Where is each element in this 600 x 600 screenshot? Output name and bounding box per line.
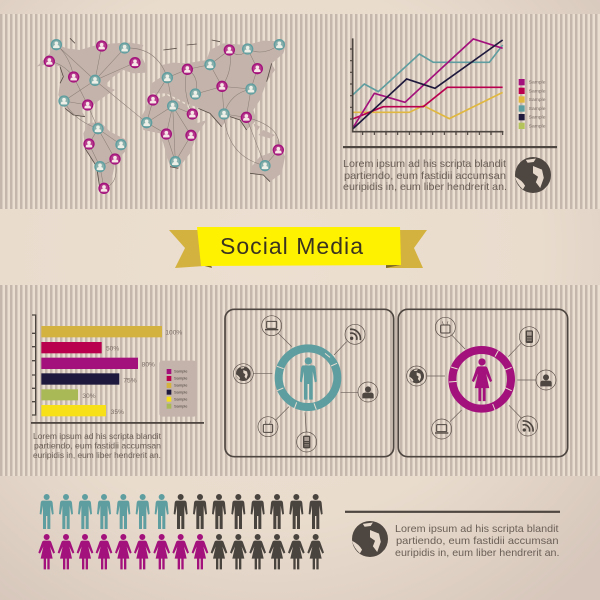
panel frame [225,309,394,457]
banner [169,227,427,268]
chart legend: Sample [529,106,546,112]
divider rule: top right [343,146,557,148]
female figure [472,358,492,401]
bar chart legend: Sample [174,403,188,408]
bar chart legend: Sample [174,369,188,374]
striped band: top [0,14,600,209]
text block: bars: partiendo, eum fastidii accumsan [34,440,161,450]
bar value labels: 50% [106,345,119,352]
map coast shadows [60,38,272,190]
bar chart [32,315,197,417]
connector lines [253,333,358,432]
magenta ring [449,350,512,410]
text block: top right [343,158,507,193]
bar value labels: 35% [111,409,124,416]
chart legend: Sample [529,88,546,94]
text block: top right: euripidis in, eum liber hendrerit an. [343,181,507,193]
icon: globe [407,366,427,386]
icon: phone [519,327,539,347]
map continents [37,41,287,193]
chart legend [519,79,546,129]
bar value labels: 75% [123,377,137,384]
chart legend: Sample [529,97,546,103]
title: Social Media [220,233,363,259]
line chart [350,38,546,135]
map nodes: magenta [44,40,284,194]
map nodes: teal [51,39,285,172]
icon: person [536,370,556,390]
text block: bars [33,431,162,460]
text block: bars: Lorem ipsum ad his scripta blandit [33,431,162,441]
bar chart legend: Sample [174,376,188,381]
icon: globe [233,364,253,384]
icon: person [358,382,378,402]
chart legend: Sample [529,80,546,86]
bars [41,326,162,416]
banner folds [201,265,400,268]
bar chart legend: Sample [174,396,188,401]
map connector lines [49,45,279,188]
bar value labels [82,329,182,416]
divider rule: bottom [345,511,560,513]
text block: bottom [395,523,560,559]
panel frame [398,309,568,457]
chart legend: Sample [529,115,546,121]
bar value labels: 80% [142,361,155,368]
icon: tv [435,317,455,337]
connector lines [427,335,536,422]
divider rule: bars [31,422,204,424]
icon: globe top right [515,157,551,193]
bar chart legend [159,361,197,417]
bar value labels: 100% [165,329,182,336]
text block: bottom: euripidis in, eum liber hendrerit an. [395,547,560,559]
text block: top right: partiendo, eum fastidii accumsan [344,170,506,182]
text block: bottom: partiendo, eum fastidii accumsan [396,535,559,547]
teal ring [277,348,337,410]
male figure [300,357,317,400]
icon: globe bottom [352,521,388,557]
bar chart legend: Sample [174,389,188,394]
icon: rss [518,416,538,436]
panel: female network [398,309,568,457]
pictogram: men row [40,494,323,529]
icon: phone [297,432,317,452]
text block: bottom: Lorem ipsum ad his scripta blandit [395,523,559,535]
text block: top right: Lorem ipsum ad his scripta blandit [343,158,506,170]
bar chart axis [32,315,36,415]
banner right tail [386,230,427,268]
bar chart legend: Sample [174,383,188,388]
pictogram: women row [38,534,324,569]
icon: tv [258,417,278,437]
chart series lines [353,39,503,129]
banner left tail [169,230,204,268]
icon: rss [345,324,365,344]
icon: laptop [262,316,282,336]
text block: bars: euripidis in, eum liber hendrerit an. [33,450,161,460]
striped band: middle [0,285,600,476]
bar value labels: 30% [82,393,96,400]
chart axes [350,38,503,135]
chart legend: Sample [529,123,546,129]
panel: male network [225,309,394,457]
world map panel [37,38,287,194]
icon: laptop [432,419,452,439]
banner ribbon [197,227,401,266]
